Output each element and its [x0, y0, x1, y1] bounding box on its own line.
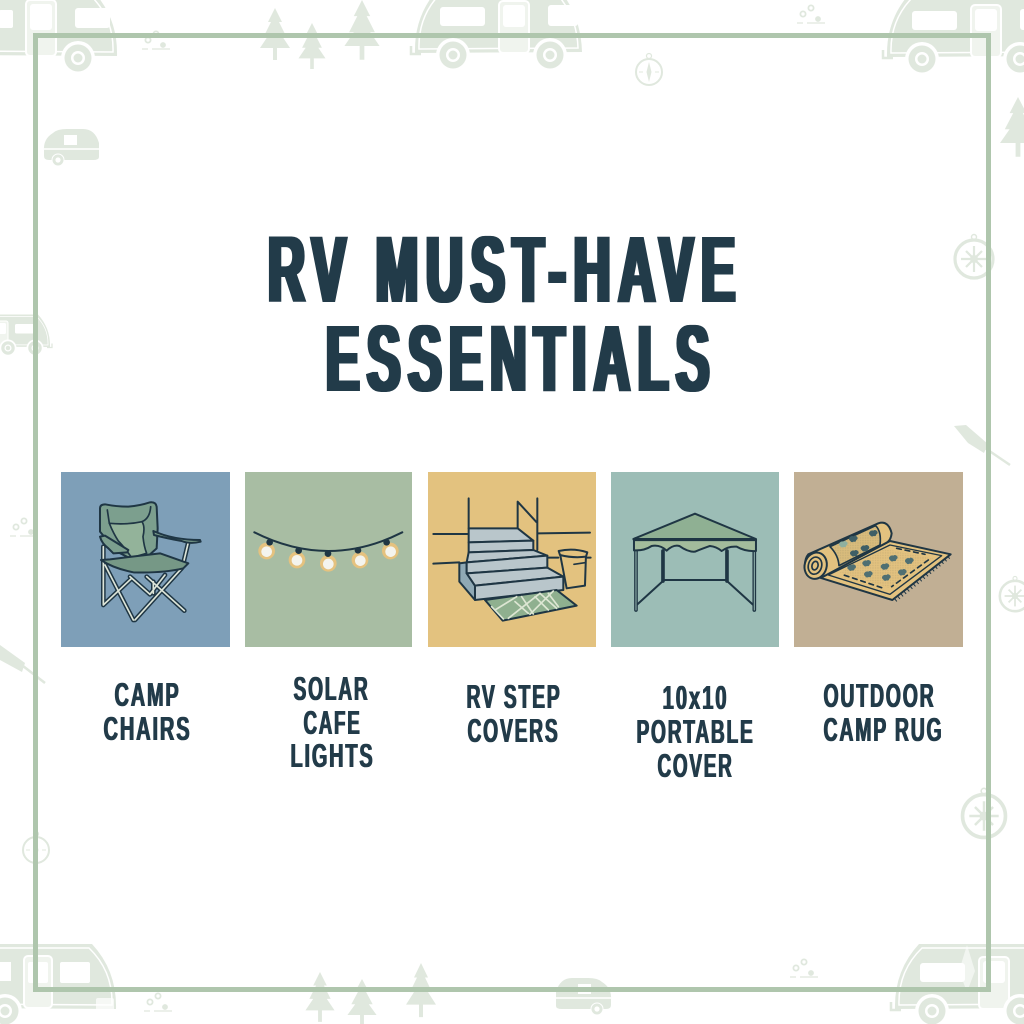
panel: outdoor camp rug [794, 472, 963, 748]
icon: camp chair [100, 502, 201, 620]
decoration: knife left [0, 645, 45, 683]
label: camp chairs: CAMP [114, 676, 180, 713]
label: camp chairs [104, 676, 192, 747]
panel: solar cafe lights [245, 472, 412, 774]
label: solar cafe lights [290, 670, 374, 774]
title [268, 217, 743, 412]
decoration: tree right [1000, 97, 1024, 157]
icon: canopy tent [633, 514, 756, 610]
panel: portable cover [611, 472, 779, 784]
decoration: small trailer bottom [556, 978, 611, 1015]
label: 10x10 portable cover: 10x10 [662, 679, 728, 716]
label: rv step covers [466, 678, 562, 749]
decoration: small trailer left [44, 129, 99, 166]
decoration: pebbles [10, 5, 825, 1011]
decoration: trees top [260, 0, 380, 69]
label: 10x10 portable cover [636, 679, 754, 784]
icon: rolled rug [802, 523, 951, 600]
decoration: RV left edge [0, 314, 52, 356]
label: solar cafe lights: LIGHTS [290, 737, 374, 774]
decoration: RV top right [883, 0, 1024, 76]
label: solar cafe lights: SOLAR [294, 670, 370, 707]
label: outdoor camp rug [824, 677, 944, 748]
panel: rv step covers [428, 472, 596, 749]
decoration: knife right [954, 425, 1010, 465]
label: rv step covers: COVERS [468, 712, 560, 749]
decoration: RV top left [0, 0, 117, 75]
decoration: compass wheel right upper [955, 234, 993, 278]
decoration: compass top [636, 54, 662, 85]
decoration: RV bottom right [891, 944, 1024, 1024]
icon: string lights [254, 532, 402, 572]
decoration: compass wheel right lower [963, 788, 1005, 837]
label: 10x10 portable cover: COVER [658, 747, 734, 784]
decoration: RV bottom left [0, 944, 116, 1024]
label: outdoor camp rug: CAMP RUG [824, 711, 944, 748]
decoration: compass left [23, 832, 49, 863]
panel: camp chairs [61, 472, 230, 747]
decoration: sparkle [959, 945, 975, 992]
label: rv step covers: RV STEP [466, 678, 562, 715]
decoration: trees bottom [305, 963, 436, 1024]
icon: rv steps [433, 498, 591, 621]
decoration: compass wheel right edge [1000, 576, 1024, 611]
label: solar cafe lights: CAFE [304, 704, 362, 741]
label: 10x10 portable cover: PORTABLE [636, 713, 754, 750]
label: outdoor camp rug: OUTDOOR [824, 677, 936, 714]
label: camp chairs: CHAIRS [104, 710, 192, 747]
decoration: RV top center [411, 0, 582, 72]
